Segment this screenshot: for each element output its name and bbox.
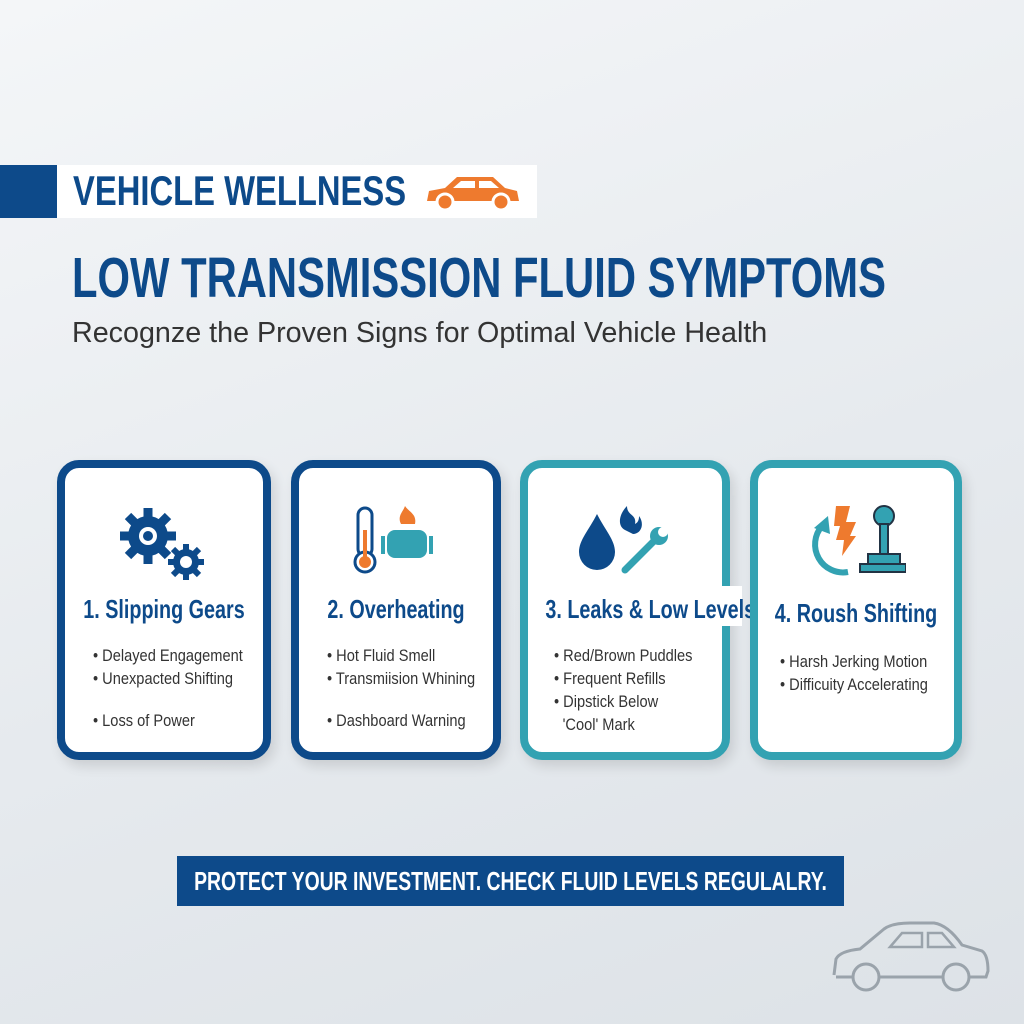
panel: slipping gears: • Delayed Engagement: [93, 646, 243, 665]
icon: orange car: [427, 177, 519, 208]
panel: slipping gears: • Unexpacted Shifting: [93, 669, 233, 688]
icon: thermometer and engine: [354, 506, 433, 574]
panel: slipping gears: [57, 460, 271, 760]
icon: arrow bolt shifter: [812, 505, 906, 576]
panel: overheating: • Dashboard Warning: [327, 711, 466, 730]
title: LOW TRANSMISSION FLUID SYMPTOMS: [72, 246, 886, 310]
banner: call to action: [177, 856, 844, 906]
panel: rough shifting: • Difficuity Accelerating: [780, 675, 928, 694]
panel: leaks: 3. Leaks & Low Levels: [545, 594, 755, 624]
panel: rough shifting: • Harsh Jerking Motion: [780, 652, 927, 671]
icon: car outline: [832, 922, 990, 992]
icon: drop flame wrench: [579, 506, 668, 574]
panel: leaks: • Frequent Refills: [554, 669, 666, 688]
white tab behind title: [528, 586, 742, 626]
panel: overheating: 2. Overheating: [327, 594, 465, 624]
panel: slipping gears: 1. Slipping Gears: [83, 594, 245, 624]
subtitle: Recognze the Proven Signs for Optimal Vehicle Health: [72, 317, 767, 349]
panel: leaks: • Dipstick Below: [554, 692, 658, 711]
panel: overheating: [291, 460, 501, 760]
panel: rough shifting: 4. Roush Shifting: [775, 598, 937, 628]
icon: gears: [120, 508, 204, 580]
panel: overheating: • Transmiision Whining: [327, 669, 475, 688]
banner: call to action: PROTECT YOUR INVESTMENT. CHECK FLUID LEVELS REGULALRY.: [194, 866, 827, 896]
panel: leaks: [520, 460, 730, 760]
panel: slipping gears: • Loss of Power: [93, 711, 195, 730]
panel: rough shifting: [750, 460, 962, 760]
header band: [0, 165, 537, 218]
heading: vehicle wellness: VEHICLE WELLNESS: [73, 167, 406, 214]
panel: leaks: • Red/Brown Puddles: [554, 646, 692, 665]
panel: leaks: 'Cool' Mark: [563, 715, 635, 734]
panel: overheating: • Hot Fluid Smell: [327, 646, 435, 665]
